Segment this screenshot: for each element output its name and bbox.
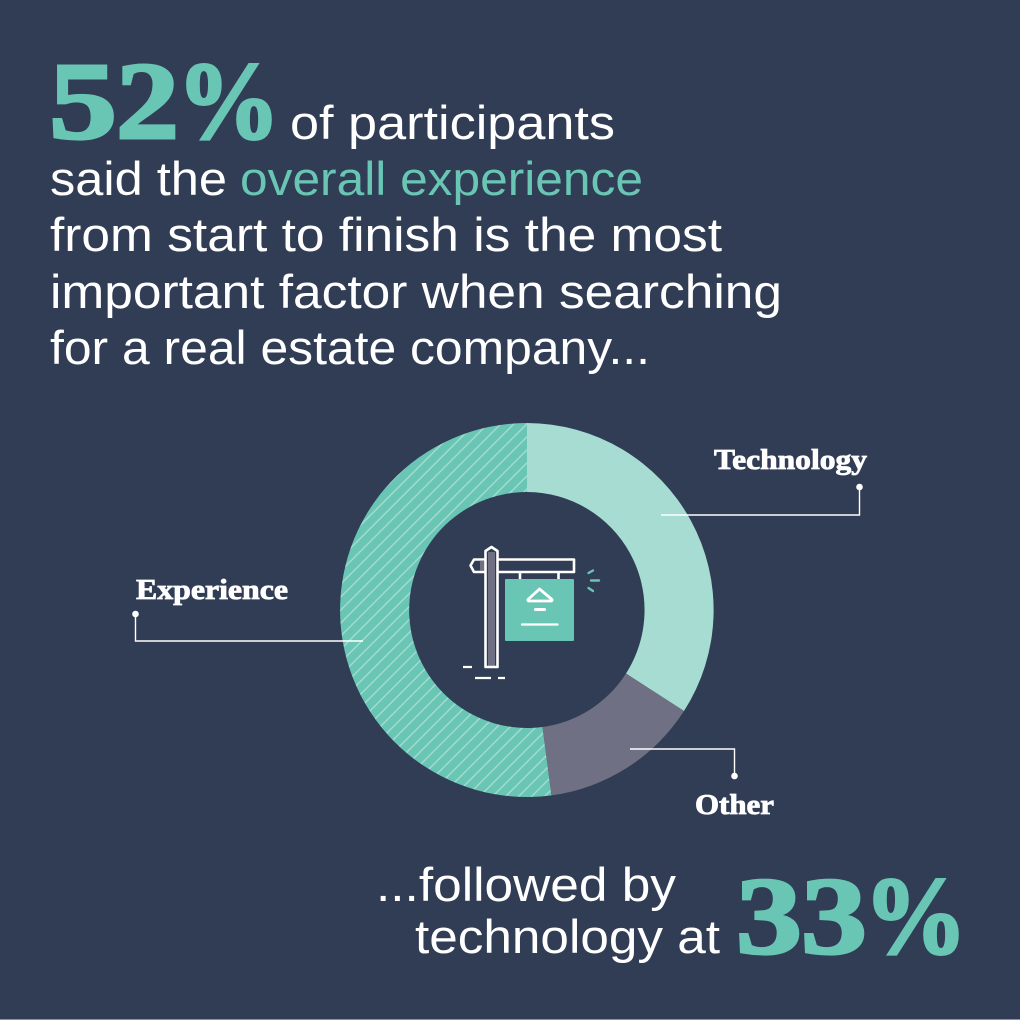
- heading text lines: said the: [50, 152, 227, 205]
- callout: experience: Experience: [136, 575, 288, 606]
- stat: 52%: %: [177, 40, 280, 162]
- callout: other: [630, 749, 774, 821]
- stat: 33%: 3: [736, 855, 802, 977]
- heading text lines: for a real estate company...: [50, 321, 650, 374]
- stat: 33%: 3: [801, 855, 867, 977]
- callout: technology: Technology: [714, 445, 867, 476]
- heading text lines: important factor when searching: [50, 265, 782, 318]
- heading text lines: of participants: [290, 96, 615, 149]
- stat: 33%: [736, 855, 967, 977]
- callout: other: Other: [695, 790, 774, 821]
- sign post: [470, 547, 574, 667]
- footer text lines: technology at: [415, 910, 720, 963]
- footer statement: 33%: [376, 855, 967, 977]
- heading: 52% of participants: [49, 40, 782, 374]
- segment: technology: [527, 423, 714, 711]
- callout: experience: [132, 575, 363, 641]
- stat: 52%: 5: [49, 40, 117, 162]
- stat: 33%: %: [864, 855, 967, 977]
- bottom edge line: [0, 1019, 1020, 1020]
- heading text lines: [50, 96, 782, 374]
- ground dashes: [463, 667, 505, 678]
- donut chart: [340, 423, 714, 797]
- hanging sign panel: [505, 579, 574, 641]
- heading text lines: from start to finish is the most: [50, 208, 722, 261]
- stat: 52%: 2: [116, 40, 179, 162]
- stat: 52%: [49, 40, 280, 162]
- segment: experience: [340, 423, 552, 797]
- segment: other: [542, 674, 684, 795]
- sparkle ticks: [588, 570, 599, 591]
- callout: technology: [661, 445, 867, 515]
- sign house glyph: [522, 589, 558, 624]
- icon: real estate sign: [463, 547, 599, 678]
- footer text lines: ...followed by: [376, 858, 677, 911]
- footer text lines: [376, 858, 720, 963]
- heading text lines: overall experience: [240, 152, 643, 205]
